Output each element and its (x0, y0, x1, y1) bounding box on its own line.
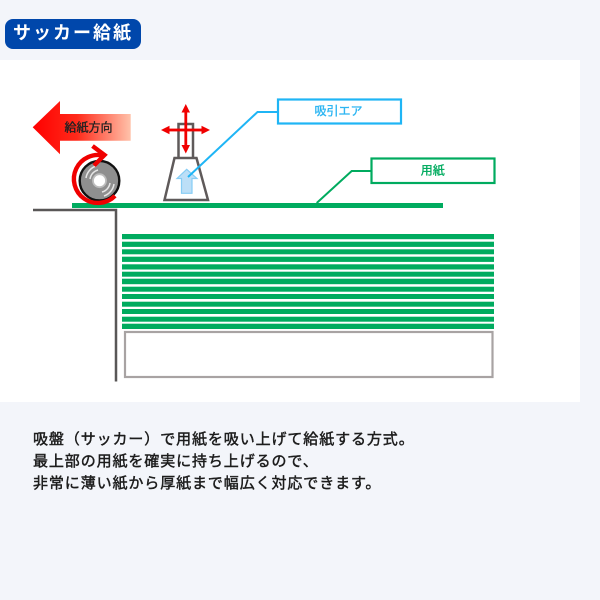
callout: paper: 用紙 (421, 164, 445, 178)
arrow: nozzle movement (161, 104, 210, 154)
arrow: roller rotation (74, 146, 115, 203)
paper tray (125, 332, 492, 377)
callout: suction air: 吸引エア (314, 104, 363, 118)
paper stack (122, 234, 494, 329)
description text: 最上部の用紙を確実に持ち上げるので、 (33, 453, 319, 470)
description text: 吸盤（サッカー）で用紙を吸い上げて給紙する方式。 (33, 431, 415, 448)
icon: suction nozzle (164, 124, 208, 200)
feed table wall (33, 210, 116, 382)
icon: feed roller (80, 161, 119, 200)
arrow: paper feed direction (33, 101, 131, 154)
title badge (5, 19, 141, 49)
description text: 非常に薄い紙から厚紙まで幅広く対応できます。 (33, 475, 381, 492)
arrow: paper feed direction: 給紙方向 (64, 120, 113, 134)
panel: diagram background (0, 60, 580, 402)
callout: suction air (188, 100, 401, 177)
callout: paper (317, 158, 494, 203)
icon: air suction arrow (177, 169, 197, 193)
paper sheet being fed (72, 203, 443, 208)
description text (33, 431, 415, 492)
title badge: サッカー給紙 (13, 23, 133, 43)
